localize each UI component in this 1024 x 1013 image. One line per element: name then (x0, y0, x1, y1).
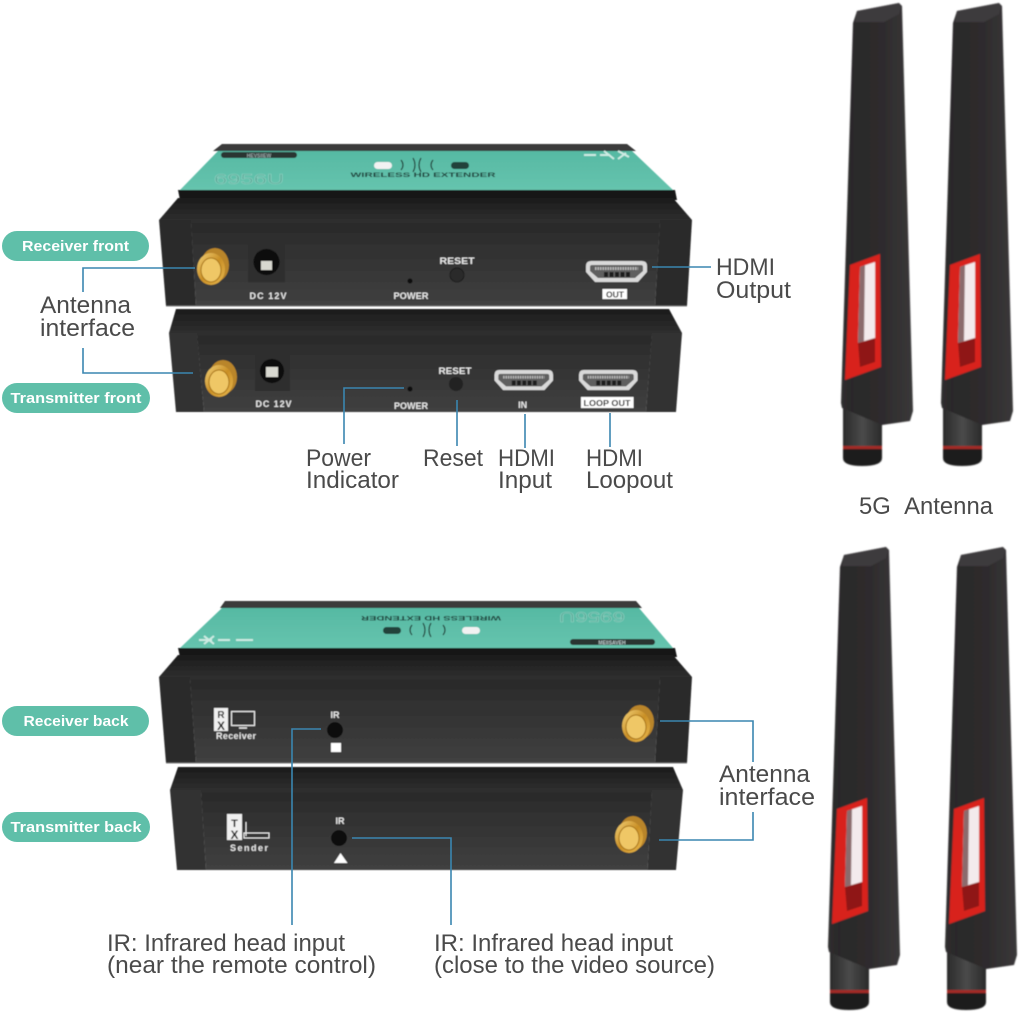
top lid markings: MEIISAVEH (598, 640, 626, 646)
TX icon and label: Sender (230, 843, 268, 853)
callout: antenna interface front: Antenna (40, 292, 132, 319)
power led: POWER (394, 291, 429, 301)
IR jack (330, 816, 348, 863)
callout: reset: Reset (423, 445, 483, 472)
label: transmitter front: Transmitter front (10, 390, 142, 407)
antenna: upper right (941, 3, 1013, 466)
transmitter front unit (169, 309, 682, 412)
RX icon and label (214, 708, 256, 741)
top lid markings (199, 608, 655, 646)
hdmi in (494, 370, 553, 410)
TX icon and label: T (231, 818, 238, 830)
DC jack: DC 12V (256, 399, 292, 409)
callout: antenna interface back (659, 721, 815, 840)
antenna: lower left (828, 547, 900, 1010)
label: receiver back: Receiver back (24, 713, 129, 730)
label: transmitter front (2, 383, 150, 413)
antenna connector (205, 360, 237, 397)
callout: HDMI input: HDMI (498, 445, 555, 472)
receiver front unit (159, 144, 692, 306)
power led: POWER (394, 401, 428, 411)
antenna: upper left (841, 3, 913, 466)
callout: antenna interface front: interface (40, 315, 135, 342)
callout: antenna interface front (40, 268, 195, 373)
reset (440, 256, 475, 282)
label: receiver front (2, 231, 149, 261)
antenna connector (615, 816, 647, 853)
RX icon and label: Receiver (216, 731, 256, 741)
callout: HDMI output (652, 254, 791, 304)
callout: IR close to the video source (352, 838, 715, 979)
hdmi out (586, 261, 647, 300)
panel: back units (159, 601, 692, 870)
RX icon and label: R (217, 710, 225, 721)
panel: front units (159, 144, 692, 412)
callout: antenna interface back: interface (719, 784, 815, 811)
hdmi in: IN (518, 400, 527, 410)
reset: RESET (440, 256, 475, 266)
label: transmitter back (2, 812, 150, 842)
callout: HDMI loopout: Loopout (586, 467, 673, 494)
TX icon and label (227, 814, 269, 853)
callout: HDMI output: Output (716, 277, 791, 304)
receiver back unit (159, 601, 692, 763)
callout: HDMI loopout (586, 413, 673, 494)
reset (438, 366, 472, 391)
top lid markings: 6956U (559, 608, 625, 625)
label: receiver front: Receiver front (22, 238, 129, 255)
callout: reset (423, 400, 483, 472)
callout: power indicator: Power (306, 445, 371, 472)
caption: 5G antenna: 5G Antenna (859, 493, 994, 520)
callout: power indicator: Indicator (306, 467, 399, 494)
power led (394, 278, 429, 301)
DC jack (255, 355, 292, 409)
antenna connector (622, 705, 654, 742)
TX icon and label: X (230, 828, 239, 842)
IR jack: IR (336, 816, 345, 826)
transmitter back unit (170, 767, 683, 870)
callout: IR near the remote control (107, 729, 376, 979)
antenna connector (197, 248, 229, 285)
reset: RESET (438, 366, 472, 376)
antenna: lower right (945, 547, 1017, 1010)
callout: IR near the remote control: IR: Infrared head input (107, 930, 345, 957)
hdmi out: OUT (606, 290, 625, 300)
hdmi loop out (579, 370, 638, 408)
callout: HDMI input (498, 414, 555, 494)
IR jack (326, 710, 344, 752)
hdmi loop out: LOOP OUT (584, 398, 631, 408)
top lid markings: HEVSIIEW (247, 154, 272, 160)
callout: IR close to the video source: IR: Infrared head input (434, 930, 673, 957)
callout: HDMI loopout: HDMI (586, 445, 643, 472)
top lid markings: 6956U (214, 171, 284, 188)
top lid markings: WIRELESS HD EXTENDER (350, 173, 497, 179)
label: transmitter back: Transmitter back (10, 819, 142, 836)
callout: IR near the remote control: (near the remote control) (107, 952, 376, 979)
callout: HDMI output: HDMI (716, 254, 775, 281)
label: receiver back (2, 706, 149, 736)
IR jack: IR (330, 710, 340, 720)
callout: HDMI input: Input (498, 467, 552, 494)
callout: IR close to the video source: (close to the video source) (434, 952, 715, 979)
callout: antenna interface back: Antenna (719, 761, 811, 788)
callout: power indicator (306, 388, 404, 494)
DC jack: DC 12V (250, 291, 286, 301)
power led (394, 386, 428, 411)
top lid markings: WIRELESS HD EXTENDER (360, 614, 501, 620)
DC jack (248, 243, 286, 301)
RX icon and label: X (217, 719, 225, 733)
top lid markings (214, 151, 629, 188)
